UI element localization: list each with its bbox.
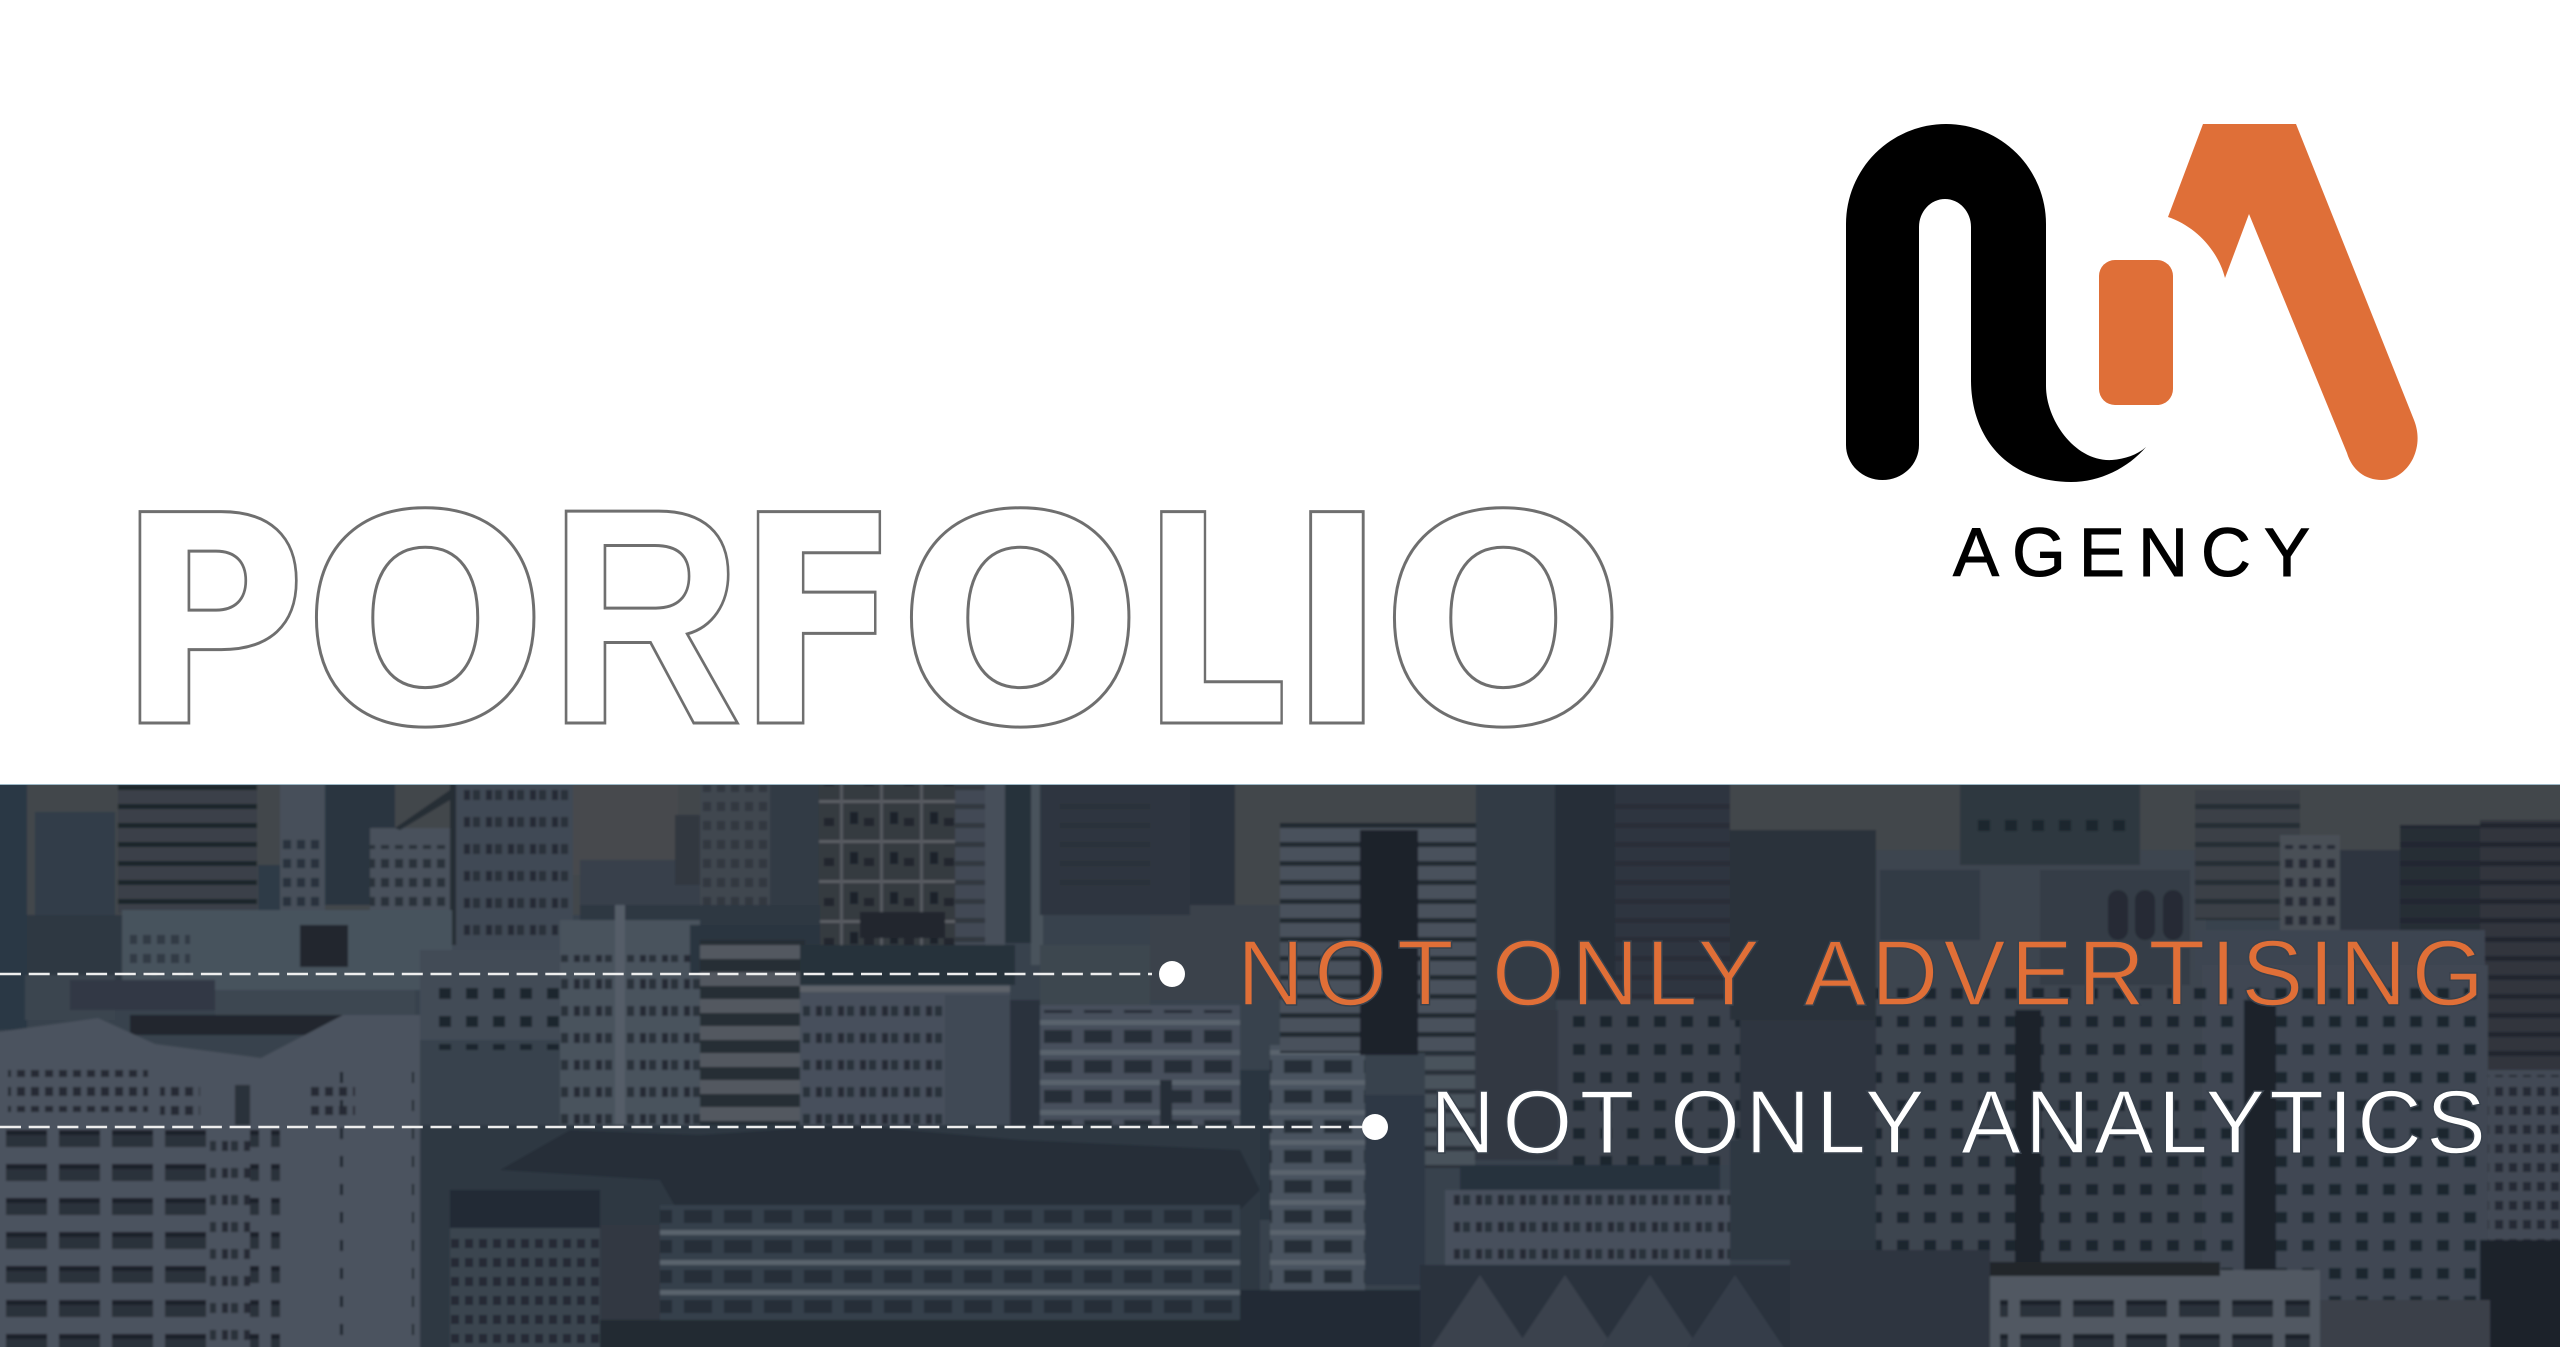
- low rooftops centre: [420, 1125, 1260, 1347]
- tagline: not only advertising: ONLY: [1492, 921, 1758, 1025]
- title: outlined PORFOLIO: P: [116, 455, 307, 792]
- title: outlined PORFOLIO: L: [1140, 455, 1288, 792]
- logo letter n: [1846, 124, 2146, 482]
- logo letter A: [2168, 124, 2418, 480]
- dashed line one: [0, 973, 1152, 975]
- title: outlined PORFOLIO: I: [1285, 455, 1389, 792]
- photo background: dark city skyline: [0, 774, 2560, 1347]
- logo wordmark: AGENCY: [1953, 514, 2310, 591]
- right skyline: [2196, 860, 2197, 918]
- tagline: not only analytics: ONLY: [1670, 1073, 1924, 1173]
- right lower low-rise: [1460, 1164, 1720, 1190]
- tagline: not only analytics: NOT: [1430, 1073, 1633, 1173]
- title: outlined PORFOLIO: F: [736, 455, 900, 792]
- big pale building lower left: [0, 1015, 420, 1347]
- logo rounded bar: [2099, 260, 2173, 405]
- centre mid: [560, 920, 700, 1125]
- left towers: [0, 775, 27, 1030]
- tagline: not only advertising: NOT: [1237, 921, 1452, 1025]
- ornate block: [1876, 850, 2206, 1290]
- sky: [27, 775, 2560, 915]
- title: outlined PORFOLIO: O: [1380, 455, 1627, 792]
- dot one: [1159, 961, 1185, 987]
- title: outlined PORFOLIO: R: [548, 445, 743, 789]
- striped tower: [1280, 823, 1476, 1053]
- title: outlined PORFOLIO: O: [302, 455, 549, 792]
- tagline: not only analytics: ANALYTICS: [1961, 1073, 2486, 1173]
- title: outlined PORFOLIO: O: [897, 455, 1144, 792]
- logo: NA Agency: [1846, 124, 2418, 591]
- dashed line two: [0, 1126, 1362, 1128]
- low mid left: [122, 910, 452, 990]
- centre upper: [573, 775, 678, 875]
- lower balcony buildings: [1040, 946, 1042, 964]
- dot two: [1362, 1114, 1388, 1140]
- tagline: not only advertising: ADVERTISING: [1804, 921, 2484, 1025]
